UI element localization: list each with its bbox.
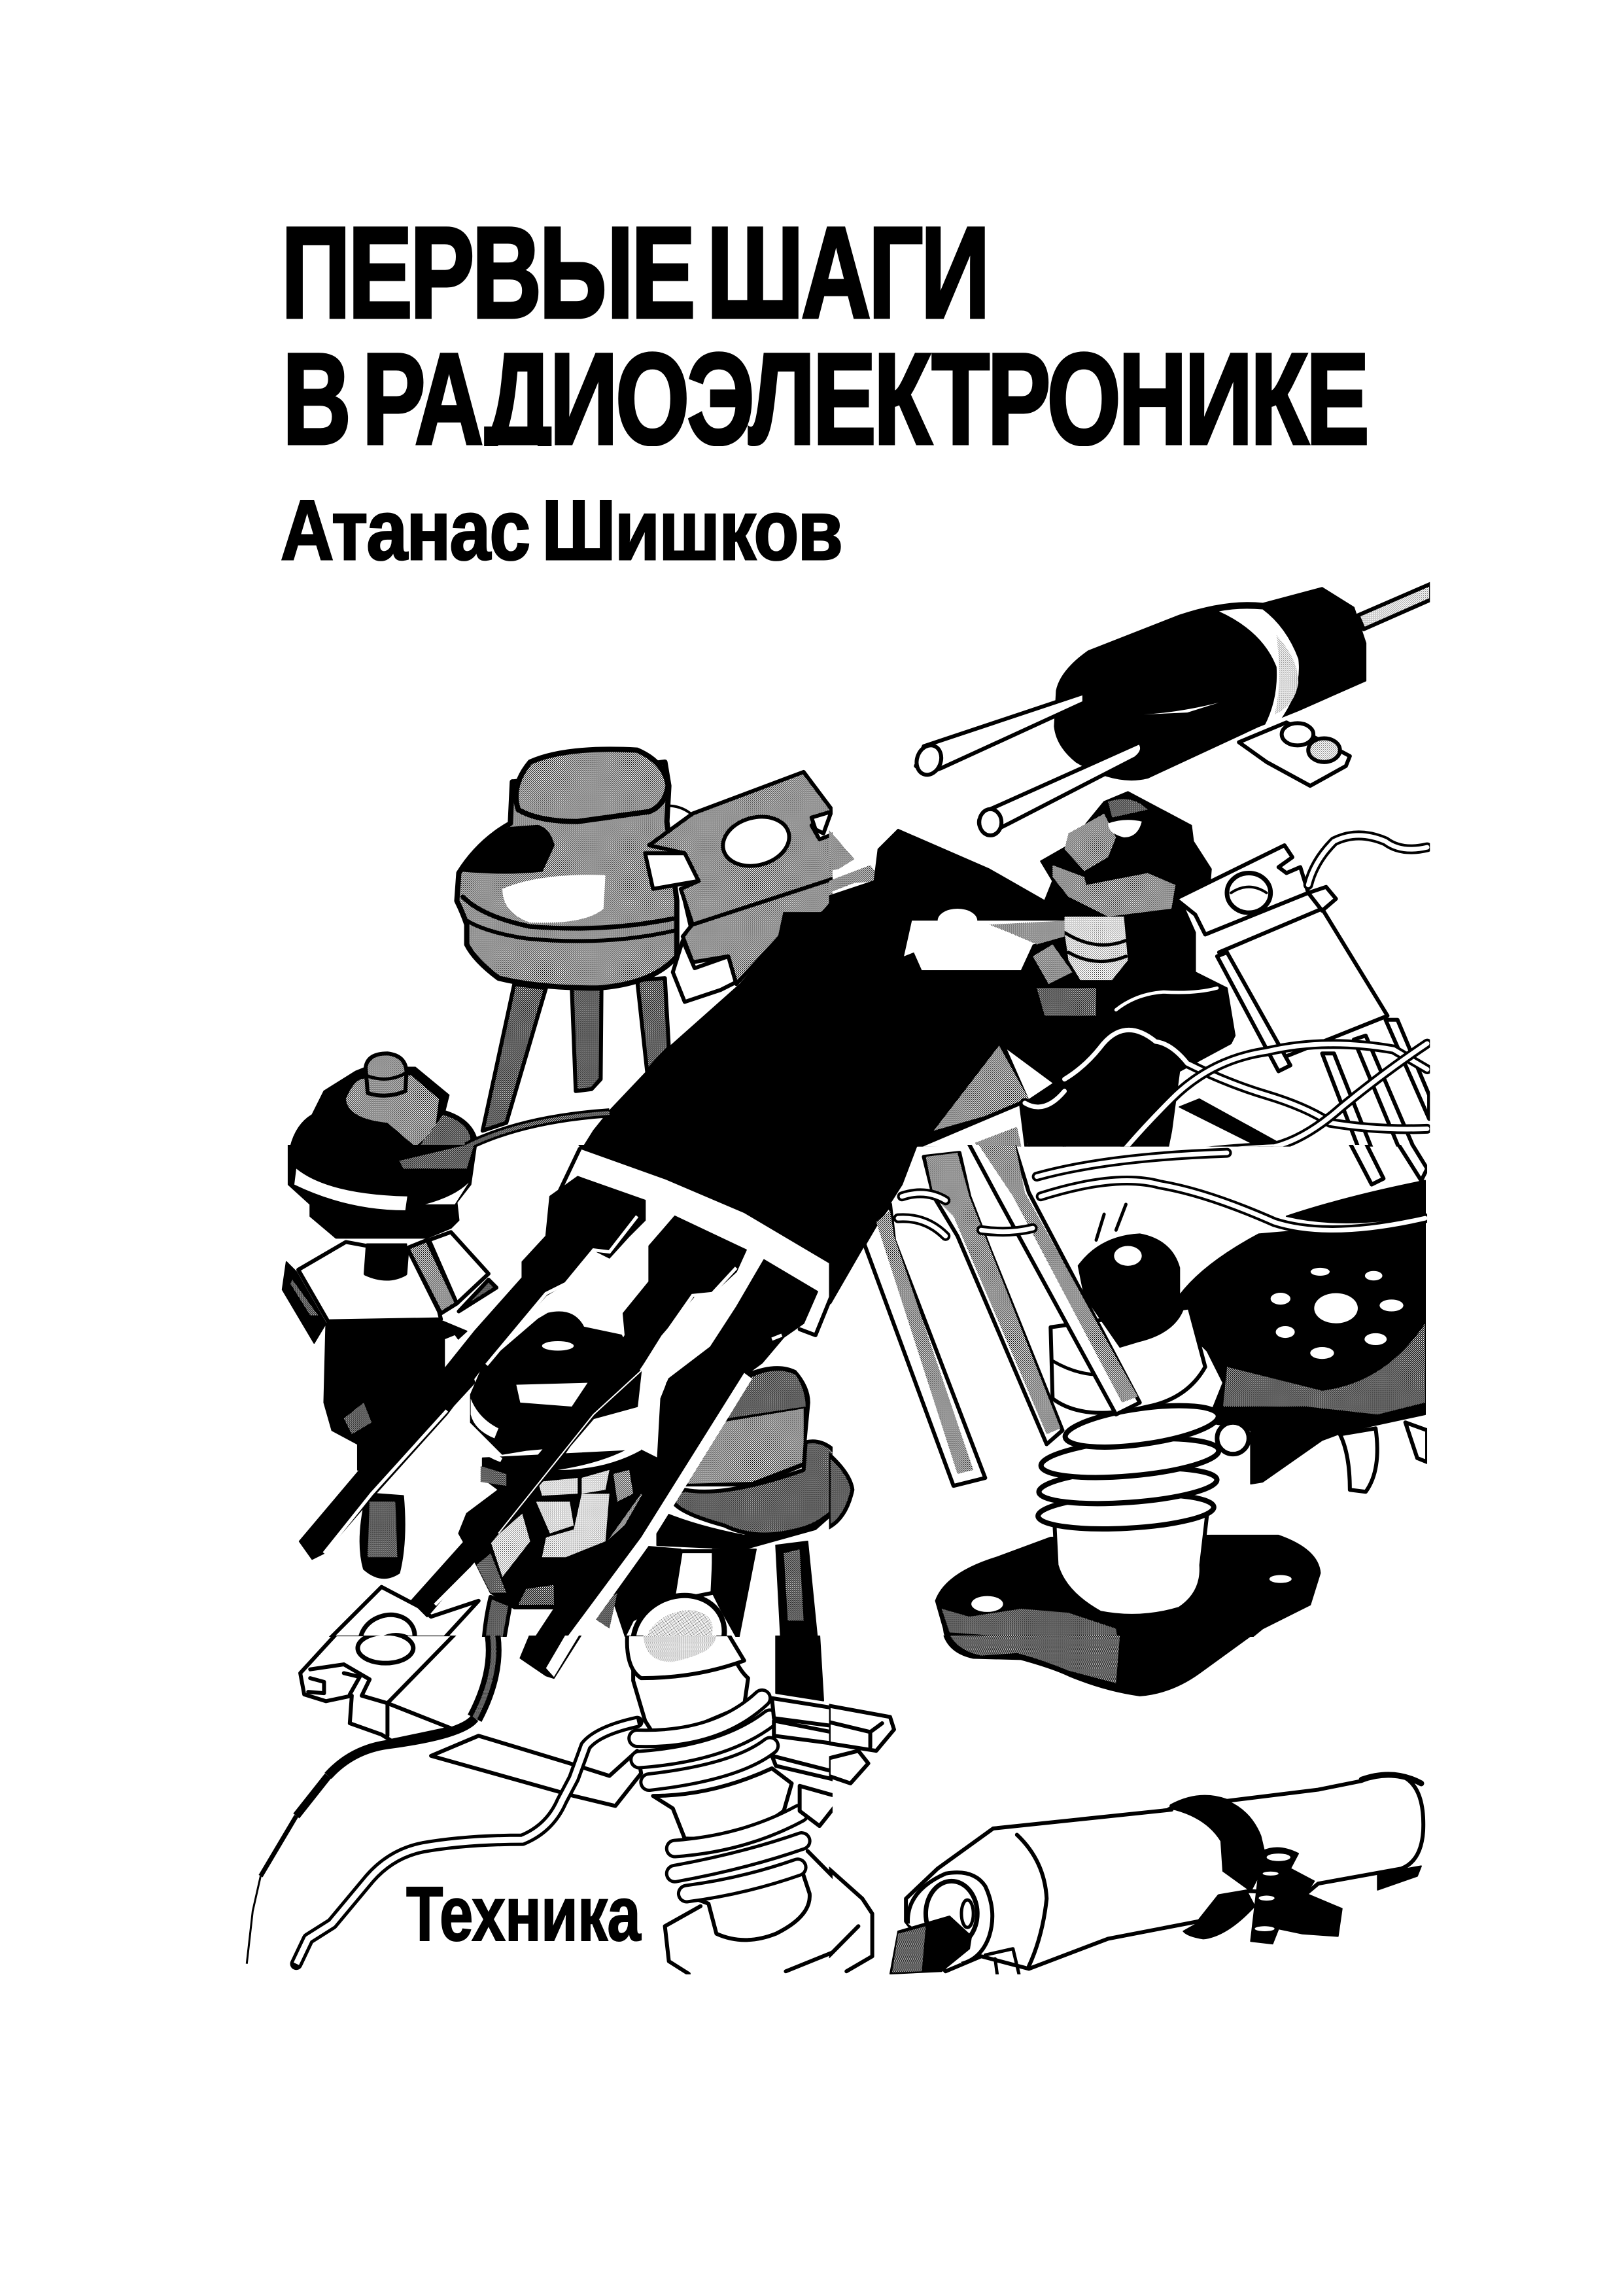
illustration: upper right tile: [827, 584, 1431, 1197]
wires over socket: [898, 1143, 1427, 1236]
plate fragment, left edge: [829, 830, 875, 892]
black mass: transistor body and knob shadow: [829, 791, 1236, 1147]
illustration: bottom left tile: [247, 1633, 850, 1974]
icon: double wire: [296, 1722, 637, 1964]
icon: lower transistor can: [458, 1450, 665, 1609]
illustration: bottom right tile: [829, 1634, 1423, 1974]
icon: power transistor body: [583, 909, 829, 1145]
icon: three transistor pins: [300, 1176, 818, 1678]
icon: capacitor: [890, 1774, 1423, 1974]
icon: left knob lower body: [283, 1143, 498, 1470]
icon: can leg: [776, 1634, 823, 1701]
icon: thick wire: [463, 1597, 510, 1728]
icon: tab plate: [645, 772, 850, 1002]
icon: lug: [360, 1494, 405, 1578]
author: Атанас Шишков: [281, 482, 842, 578]
icon: can cap: [471, 1312, 641, 1470]
icon: knob, grey faces: [1037, 799, 1175, 1016]
icon: ferrite coil: [912, 584, 1431, 835]
publisher name: Техника: [406, 1871, 642, 1957]
title: ПЕРВЫЕ ШАГИ: [281, 200, 988, 345]
icon: right transistor can: [585, 1367, 848, 1700]
leads and wires: [1025, 835, 1429, 1182]
icon: coil, lower centre: [627, 1634, 850, 1974]
icon: octal socket: [1179, 1222, 1427, 1492]
icon: left knob top: [290, 1051, 477, 1147]
white patch on transistor: [904, 909, 1073, 984]
illustration: upper left tile: [290, 746, 833, 1147]
icon: base flange: [936, 1535, 1320, 1696]
illustration: lower left tile: [281, 1145, 833, 1637]
icon: coil outline and terminals, right part: [829, 1706, 894, 1971]
icon: flat leads: [865, 1141, 1140, 1486]
icon: metal strip: [431, 1736, 641, 1806]
title: [286, 226, 1367, 446]
icon: coil former with windings: [1037, 1204, 1221, 1616]
icon: coil head: [619, 1581, 738, 1692]
icon: pin end: [520, 1634, 581, 1678]
icon: transistor can: [457, 749, 691, 988]
icon: tab capacitor: [1175, 845, 1387, 1072]
grey triangle plate: [917, 1045, 1053, 1147]
icon: lead wire: [467, 1113, 610, 1147]
icon: second can flange edge: [829, 1454, 852, 1528]
icon: thick wire: [247, 1634, 494, 1964]
icon: tab plate, lower left: [300, 1587, 479, 1700]
illustration: lower right tile: [829, 1141, 1427, 1696]
icon: tab plate lower part: [300, 1633, 455, 1741]
black body corner: [829, 1143, 918, 1303]
icon: package of power transistor: [546, 1143, 850, 1442]
icon: base flange bottom: [944, 1634, 1253, 1696]
icon: terminals: [772, 1698, 850, 1826]
icon: transistor can legs: [483, 978, 669, 1130]
